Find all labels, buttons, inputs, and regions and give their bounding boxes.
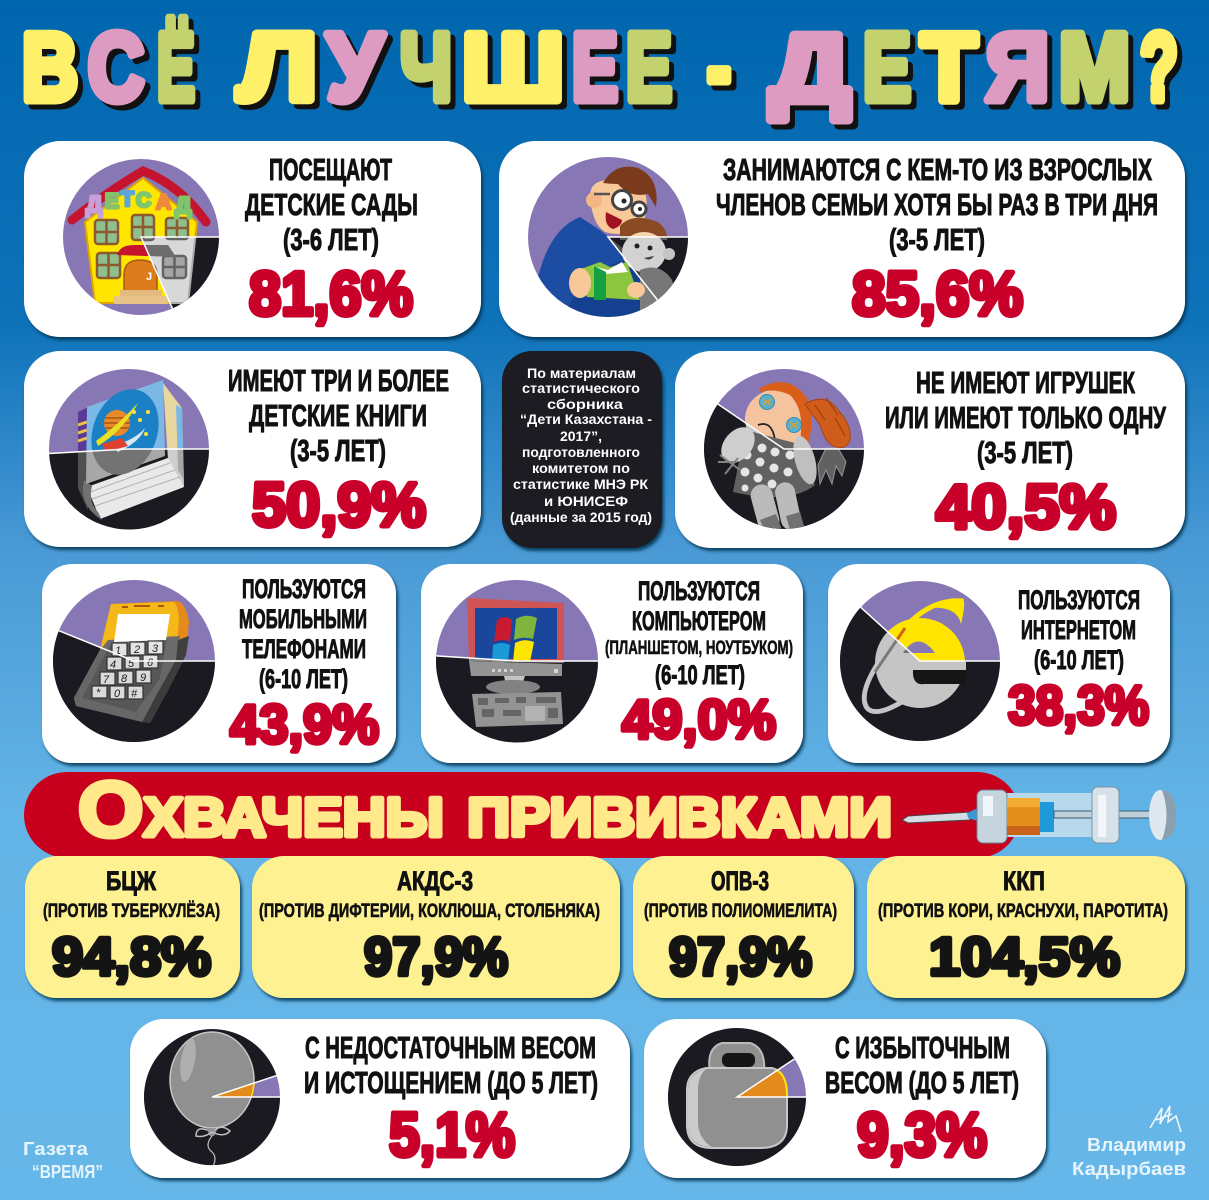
panel: polio vaccine: (ПРОТИВ ПОЛИОМИЕЛИТА) bbox=[644, 901, 837, 922]
panel: polio vaccine bbox=[633, 856, 854, 998]
title: Л bbox=[238, 14, 317, 121]
text: phones label: МОБИЛЬНЫМИ bbox=[239, 604, 367, 634]
credit: author with signature: Кадырбаев bbox=[1072, 1159, 1186, 1179]
text: phones label: ТЕЛЕФОНАМИ bbox=[242, 634, 366, 664]
icon: book pie bbox=[49, 369, 209, 530]
panel: time with adults bbox=[499, 141, 1185, 337]
text: underweight label bbox=[304, 1030, 598, 1100]
text: phones label: (6-10 ЛЕТ) bbox=[259, 664, 348, 694]
panel: BCG vaccine: БЦЖ bbox=[106, 866, 156, 896]
text: underweight label: С НЕДОСТАТОЧНЫМ ВЕСОМ bbox=[305, 1030, 596, 1065]
source note: сборника bbox=[547, 396, 623, 412]
source note: и ЮНИСЕФ bbox=[544, 493, 628, 509]
title: Е bbox=[868, 19, 916, 126]
panel: toys bbox=[675, 351, 1185, 548]
text: internet label bbox=[1018, 585, 1140, 675]
text: computers label: (ПЛАНШЕТОМ, НОУТБУКОМ) bbox=[605, 638, 793, 659]
value: 43,9%: 43,9% bbox=[230, 693, 379, 755]
icon: kindergarten pie bbox=[63, 159, 219, 315]
text: toys label bbox=[885, 365, 1166, 470]
title: Ч bbox=[400, 14, 452, 121]
title: Ч bbox=[405, 19, 457, 126]
text: overweight label bbox=[825, 1030, 1019, 1100]
icon: balloon pie bbox=[144, 1029, 280, 1168]
title: В bbox=[27, 19, 83, 126]
text: books label: (3-5 ЛЕТ) bbox=[290, 433, 386, 468]
text: phones label: ПОЛЬЗУЮТСЯ bbox=[242, 574, 366, 604]
source note: “Дети Казахстана - bbox=[520, 411, 652, 427]
text: books label bbox=[228, 363, 449, 468]
source note: статистике МНЭ РК bbox=[513, 476, 648, 492]
value: 85,6%: 85,6% bbox=[852, 260, 1023, 329]
source note: подготовленного bbox=[522, 444, 640, 460]
text: phones label bbox=[239, 574, 367, 694]
title: Т bbox=[921, 14, 977, 121]
title: У bbox=[332, 19, 389, 126]
text: computers label: (6-10 ЛЕТ) bbox=[655, 660, 745, 690]
title: Е bbox=[577, 19, 623, 126]
credit: author with signature: Владимир bbox=[1087, 1135, 1186, 1155]
source note: (данные за 2015 год) bbox=[510, 509, 652, 525]
panel: DTP vaccine: (ПРОТИВ ДИФТЕРИИ, КОКЛЮША, СТОЛБНЯКА) bbox=[259, 901, 600, 922]
title: Я bbox=[986, 14, 1049, 121]
panel: computers bbox=[421, 564, 803, 763]
value: 40,5%: 40,5% bbox=[936, 473, 1116, 542]
title: Я bbox=[991, 19, 1054, 126]
panel: MMR vaccine: 104,5% bbox=[929, 927, 1120, 987]
value: 5,1%: 5,1% bbox=[389, 1101, 515, 1170]
panel: DTP vaccine: 97,9% bbox=[364, 927, 508, 987]
text: underweight label: И ИСТОЩЕНИЕМ (ДО 5 ЛЕТ) bbox=[304, 1065, 598, 1100]
panel: internet bbox=[828, 564, 1170, 763]
text: computers label: ПОЛЬЗУЮТСЯ bbox=[638, 576, 760, 606]
value: 49,0%: 49,0% bbox=[622, 688, 776, 750]
title: Т bbox=[926, 19, 982, 126]
icon: parent reading pie bbox=[528, 157, 688, 320]
title: Е bbox=[572, 14, 618, 121]
icon: internet pie bbox=[840, 581, 1000, 741]
text: computers label bbox=[605, 576, 793, 690]
credit: author with signature bbox=[1072, 1106, 1186, 1179]
title: Ш bbox=[462, 14, 564, 121]
value: 81,6%: 81,6% bbox=[249, 260, 413, 329]
text: internet label: ПОЛЬЗУЮТСЯ bbox=[1018, 585, 1140, 615]
panel: DTP vaccine bbox=[252, 856, 620, 998]
icon: computer pie bbox=[436, 580, 598, 743]
text: kindergartens label: ПОСЕЩАЮТ bbox=[269, 152, 392, 187]
text: adults label bbox=[716, 152, 1158, 257]
title: ? bbox=[1145, 19, 1183, 126]
value: 50,9%: 50,9% bbox=[252, 471, 426, 540]
icon: doll pie bbox=[704, 369, 864, 534]
title: У bbox=[327, 14, 384, 121]
title: Е bbox=[631, 19, 677, 126]
banner: vaccination heading: Охвачены прививками bbox=[78, 765, 892, 853]
icon: kettlebell pie bbox=[668, 1028, 806, 1166]
title: Д bbox=[775, 20, 855, 127]
title: ? bbox=[1140, 14, 1178, 121]
panel: BCG vaccine bbox=[25, 856, 240, 998]
text: toys label: (3-5 ЛЕТ) bbox=[977, 435, 1073, 470]
panel: mobile phones bbox=[42, 564, 396, 763]
title: - bbox=[712, 19, 736, 126]
title: - bbox=[707, 14, 731, 121]
title: Ё bbox=[162, 19, 200, 126]
panel: BCG vaccine: 94,8% bbox=[52, 927, 211, 987]
title: Е bbox=[626, 14, 672, 121]
panel: DTP vaccine: АКДС-3 bbox=[397, 866, 473, 896]
value: 9,3%: 9,3% bbox=[857, 1101, 987, 1170]
source note: 2017”, bbox=[560, 428, 602, 444]
source note: статистического bbox=[522, 380, 640, 396]
text: kindergartens label bbox=[245, 152, 418, 257]
text: computers label: КОМПЬЮТЕРОМ bbox=[632, 606, 766, 636]
text: overweight label: ВЕСОМ (ДО 5 ЛЕТ) bbox=[825, 1065, 1019, 1100]
text: books label: ИМЕЮТ ТРИ И БОЛЕЕ bbox=[228, 363, 449, 398]
panel: MMR vaccine bbox=[867, 856, 1185, 998]
source note: комитетом по bbox=[532, 460, 630, 476]
title: С bbox=[93, 19, 149, 126]
text: kindergartens label: ДЕТСКИЕ САДЫ bbox=[245, 187, 418, 222]
panel: books bbox=[24, 351, 481, 547]
panel: MMR vaccine: ККП bbox=[1003, 866, 1045, 896]
source note bbox=[502, 351, 662, 548]
panel: BCG vaccine: (ПРОТИВ ТУБЕРКУЛЁЗА) bbox=[43, 901, 220, 922]
title: Е bbox=[863, 14, 911, 121]
text: overweight label: С ИЗБЫТОЧНЫМ bbox=[835, 1030, 1010, 1065]
title: М bbox=[1064, 19, 1135, 126]
text: internet label: (6-10 ЛЕТ) bbox=[1034, 645, 1124, 675]
title: С bbox=[88, 14, 144, 121]
panel: kindergartens bbox=[24, 141, 481, 337]
panel: polio vaccine: ОПВ-3 bbox=[711, 866, 769, 896]
text: internet label: ИНТЕРНЕТОМ bbox=[1021, 615, 1136, 645]
title: М bbox=[1059, 14, 1130, 121]
icon: syringe bbox=[902, 787, 1176, 843]
panel: overweight bbox=[644, 1019, 1046, 1178]
title: Ш bbox=[467, 19, 569, 126]
source note: По материалам bbox=[527, 365, 636, 381]
panel: underweight bbox=[130, 1019, 630, 1178]
title: Л bbox=[243, 19, 322, 126]
panel: polio vaccine: 97,9% bbox=[669, 927, 812, 987]
title: Д bbox=[770, 15, 850, 122]
text: adults label: (3-5 ЛЕТ) bbox=[889, 222, 985, 257]
text: kindergartens label: (3-6 ЛЕТ) bbox=[283, 222, 379, 257]
credit: newspaper: “ВРЕМЯ” bbox=[32, 1162, 103, 1182]
title bbox=[22, 14, 1183, 127]
title: Ё bbox=[157, 14, 195, 121]
credit: newspaper bbox=[23, 1139, 103, 1182]
credit: newspaper: Газета bbox=[23, 1139, 89, 1159]
icon: phone pie bbox=[53, 580, 215, 742]
title: В bbox=[22, 14, 78, 121]
text: books label: ДЕТСКИЕ КНИГИ bbox=[249, 398, 427, 433]
value: 38,3%: 38,3% bbox=[1008, 674, 1149, 736]
